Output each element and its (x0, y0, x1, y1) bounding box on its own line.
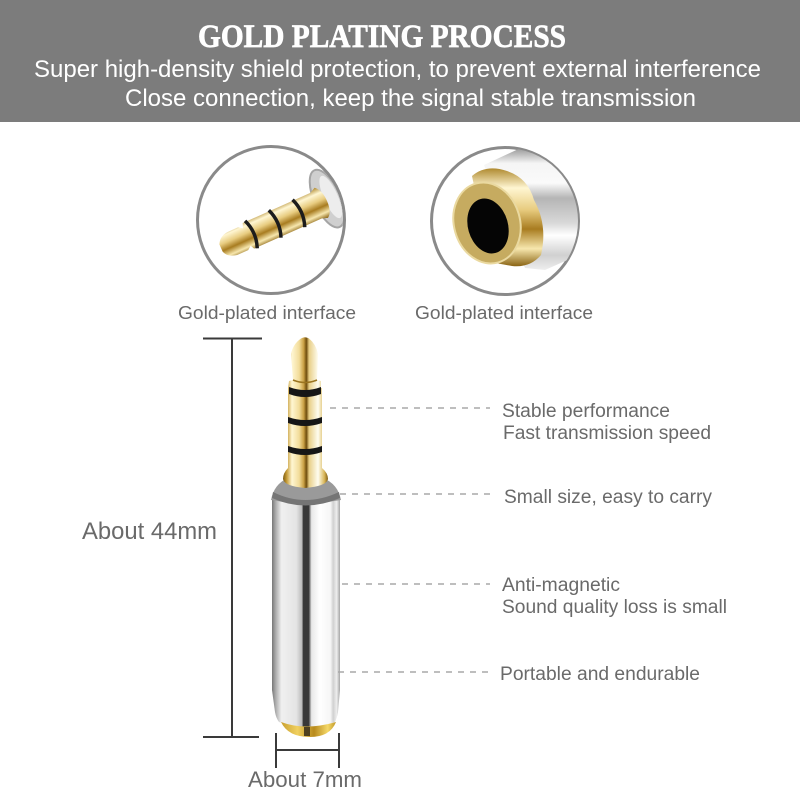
title: GOLD PLATING PROCESS (198, 19, 566, 55)
callout: portable: Portable and endurable (500, 664, 700, 685)
gold plug (283, 337, 328, 488)
insulating rings (288, 387, 322, 455)
callout: stable performance: Fast transmission speed (503, 423, 711, 444)
header banner (0, 0, 800, 122)
adapter illustration (271, 337, 341, 737)
icon: plug tip, gold-plated (219, 168, 343, 256)
callout: stable performance (502, 401, 711, 444)
callout: anti-magnetic: Anti-magnetic (502, 575, 620, 596)
collar (271, 478, 341, 503)
callout: small size: Small size, easy to carry (504, 487, 712, 508)
subtitle line 1: Super high-density shield protection, to prevent external interference (34, 56, 761, 83)
dimension: height (82, 338, 262, 737)
callout: anti-magnetic (502, 575, 727, 618)
dimension label: height: About 44mm (82, 518, 217, 545)
dimension label: width: About 7mm (248, 767, 362, 792)
gold socket end (281, 722, 336, 737)
label: plug interface: Gold-plated interface (178, 303, 356, 323)
label: socket interface: Gold-plated interface (415, 303, 593, 323)
icon: silver barrel with gold socket (452, 150, 578, 270)
callout: anti-magnetic: Sound quality loss is small (502, 597, 727, 618)
subtitle line 2: Close connection, keep the signal stable transmission (125, 85, 696, 112)
circle: socket detail (432, 146, 590, 294)
circle: plug tip detail (198, 146, 352, 294)
callout: stable performance: Stable performance (502, 401, 670, 422)
silver body (272, 498, 340, 728)
dimension: width (248, 733, 362, 792)
leader lines (330, 408, 490, 672)
